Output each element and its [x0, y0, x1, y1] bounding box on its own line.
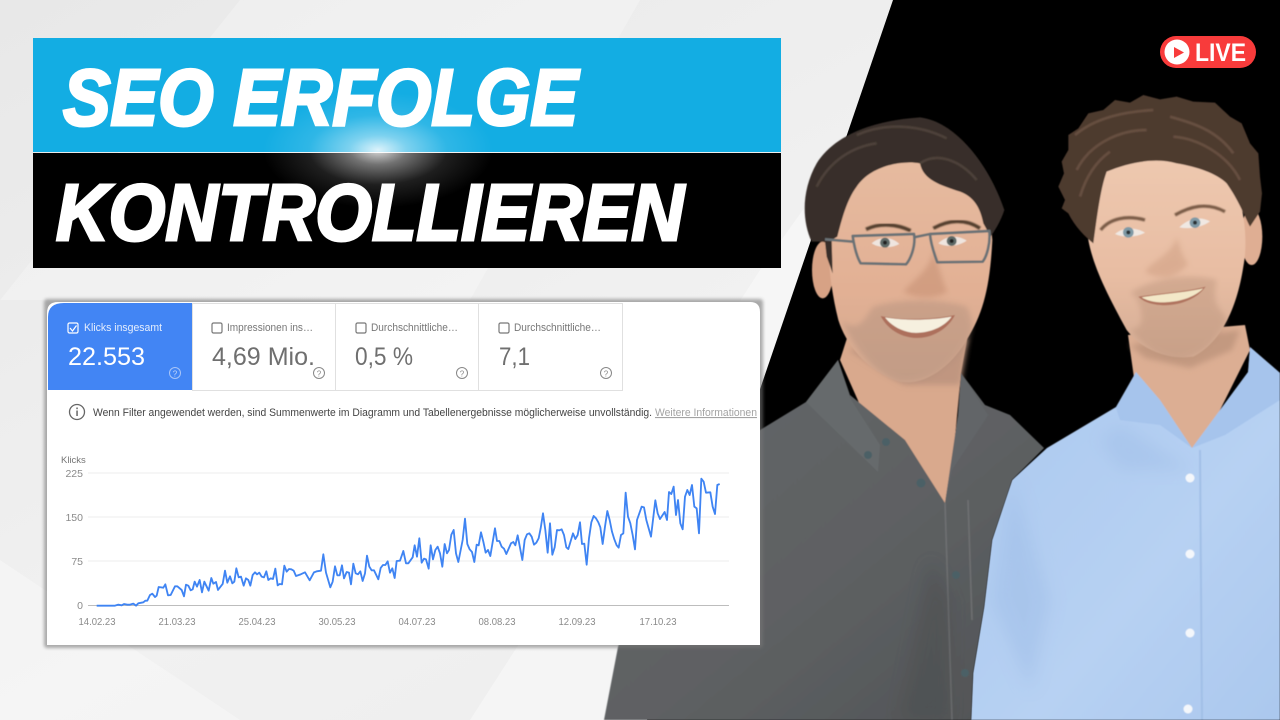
- metric tab: average CTR: [336, 304, 478, 390]
- metric tab: impressions: 4,69 Mio.: [212, 343, 315, 371]
- brows left: [866, 225, 911, 231]
- metric tab: average CTR: 0,5 %: [355, 343, 413, 371]
- line chart: clicks: 150: [65, 512, 83, 524]
- metric tab: impressions: ?: [317, 370, 322, 378]
- line chart: clicks: [61, 455, 729, 628]
- title banner: [33, 38, 781, 268]
- hair left: [805, 117, 1004, 273]
- head left: [805, 117, 1004, 382]
- glow: [263, 92, 493, 208]
- metric tab: average CTR: Durchschnittliche…: [371, 322, 458, 334]
- nose left: [903, 250, 947, 297]
- shirt placket: [945, 500, 972, 720]
- shirt shading: [1200, 450, 1202, 720]
- line chart: clicks: 08.08.23: [478, 616, 516, 628]
- metric tab: clicks: 22.553: [68, 343, 145, 371]
- neck right: [1128, 325, 1250, 450]
- icon: play: [1164, 40, 1190, 64]
- black diagonal panel: [647, 0, 1280, 720]
- metric tab: impressions: Impressionen ins…: [227, 322, 313, 334]
- smile right: [1138, 287, 1206, 305]
- metric tab: average position: Durchschnittliche…: [514, 322, 601, 334]
- line chart: clicks: 75: [71, 556, 83, 568]
- line chart: clicks: 225: [65, 468, 83, 480]
- eyes left: [872, 238, 899, 247]
- heading line 1: SEO ERFOLGE: [63, 53, 580, 142]
- shirt buttons left: [864, 438, 969, 677]
- line chart: clicks: 25.04.23: [238, 616, 276, 628]
- shirt collar left: [806, 360, 880, 472]
- metric tab: impressions: [192, 304, 336, 390]
- blue band: [33, 38, 781, 152]
- metric tab: average position: ?: [604, 370, 609, 378]
- live badge: [1160, 36, 1256, 68]
- shirt collar: [1116, 372, 1192, 448]
- info notice: [70, 404, 757, 420]
- metric tab: average position: [478, 304, 622, 390]
- brows right: [1101, 218, 1145, 230]
- metric tab: clicks: Klicks insgesamt: [84, 322, 162, 334]
- shirt buttons: [1184, 474, 1194, 714]
- line chart: clicks: 12.09.23: [558, 616, 596, 628]
- smile left: [881, 315, 955, 338]
- neck left: [840, 335, 968, 505]
- panel: search console card: [44, 299, 763, 648]
- metric tab: average position: 7,1: [499, 343, 530, 371]
- line chart: clicks: 04.07.23: [398, 616, 436, 628]
- line chart: clicks: 21.03.23: [158, 616, 196, 628]
- line chart: clicks: 30.05.23: [318, 616, 356, 628]
- metric tab: clicks: [48, 303, 192, 390]
- metric tab: clicks: ?: [173, 370, 178, 378]
- line chart: clicks: 14.02.23: [78, 616, 116, 628]
- eyes right: [1115, 229, 1145, 237]
- head right: [1058, 95, 1262, 359]
- nose right: [1145, 237, 1188, 277]
- heading line 2: KONTROLLIEREN: [56, 168, 686, 257]
- metric tab: average CTR: ?: [460, 370, 465, 378]
- glasses: [825, 231, 990, 264]
- hair right: [1058, 95, 1262, 243]
- person: right man in blue shirt: [971, 95, 1280, 720]
- line chart: clicks: 17.10.23: [640, 616, 677, 628]
- info notice: Wenn Filter angewendet werden, sind Summenwerte im Diagramm und Tabellenergebnisse möglicherweise unvollständig.: [93, 407, 652, 419]
- info notice: Weitere Informationen: [655, 407, 757, 419]
- line chart: clicks: Klicks: [61, 455, 86, 466]
- live badge: LIVE: [1195, 39, 1246, 67]
- black band: [33, 153, 781, 268]
- line chart: clicks: 0: [77, 600, 83, 612]
- blue shirt: [971, 347, 1280, 720]
- person: left man in grey shirt: [604, 117, 1044, 720]
- grey shirt: [604, 360, 1044, 720]
